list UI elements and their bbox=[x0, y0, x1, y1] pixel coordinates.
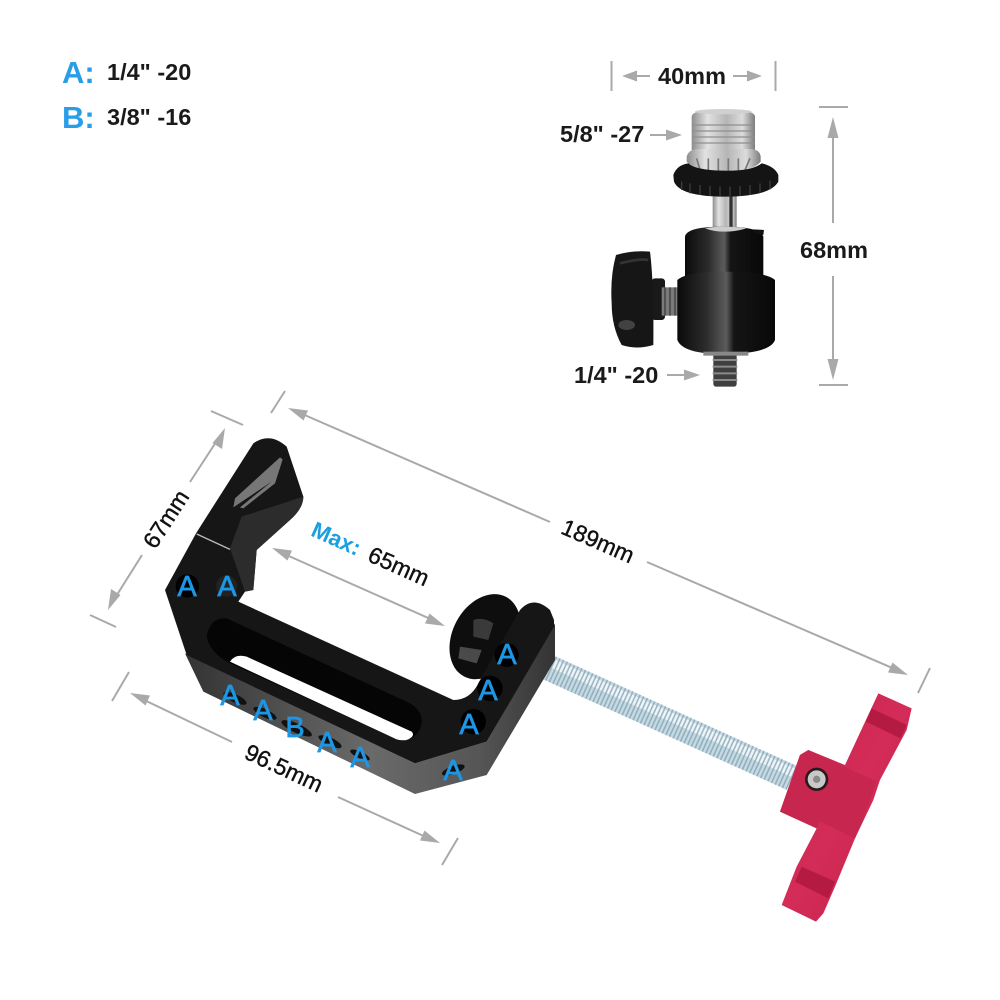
arm seam bbox=[197, 534, 230, 549]
hub shading bbox=[780, 750, 877, 838]
knob screw bbox=[652, 278, 680, 320]
dimension: 96.5mm slot length: 96.5mm bbox=[241, 739, 327, 797]
handle body bbox=[780, 693, 912, 922]
dimension: 67mm jaw height: 67mm bbox=[138, 485, 194, 553]
mounting hole labels: A bbox=[478, 675, 498, 707]
silver adapter bbox=[692, 109, 755, 150]
dimension: 68mm height: 68mm bbox=[800, 237, 868, 263]
side holes bbox=[222, 689, 466, 778]
black knurled wheel bbox=[673, 163, 778, 197]
lower lobe shading bbox=[795, 867, 835, 898]
threaded bolt bbox=[713, 352, 737, 387]
mounting hole labels: A bbox=[177, 571, 197, 603]
ball socket upper body bbox=[685, 227, 764, 280]
dimension: max 65mm opening: Max: bbox=[308, 517, 365, 561]
clamp pad knob bbox=[435, 582, 535, 692]
mounting hole labels: A bbox=[220, 680, 240, 712]
threaded screw rod bbox=[543, 660, 794, 778]
mounting hole labels: B bbox=[285, 712, 305, 744]
dimension: 189mm length bbox=[271, 391, 930, 693]
dimension: 40mm width: 40mm bbox=[658, 63, 726, 89]
dimension: 67mm jaw height bbox=[90, 411, 243, 627]
dimension: max 65mm opening: 65mm bbox=[364, 541, 433, 591]
stem bbox=[713, 195, 737, 232]
silver knurled ring bbox=[687, 149, 761, 172]
dimension: 96.5mm slot length bbox=[112, 672, 458, 865]
mounting hole labels: A bbox=[217, 571, 237, 603]
mounting hole labels: A bbox=[350, 742, 370, 774]
legend: thread sizes bbox=[62, 55, 191, 135]
lower body cylinder bbox=[677, 272, 775, 356]
arm silver reflection bbox=[233, 457, 283, 508]
dimension: 40mm width bbox=[612, 61, 776, 91]
label: 1/4 inch -20 thread with arrow bbox=[574, 362, 700, 388]
mounting hole labels: A bbox=[459, 709, 479, 741]
legend row B: B: bbox=[62, 100, 95, 135]
legend row A bbox=[62, 55, 191, 90]
arm front highlight bbox=[230, 497, 303, 592]
legend row B bbox=[62, 100, 191, 135]
clamp side face bbox=[185, 623, 555, 794]
legend row A: A: bbox=[62, 55, 95, 90]
clamp top face bbox=[165, 438, 554, 763]
mounting hole labels: A bbox=[497, 639, 517, 671]
hex screw bbox=[805, 768, 828, 791]
top holes bbox=[176, 574, 519, 734]
dimension: max 65mm opening bbox=[272, 516, 445, 626]
red T-handle knob bbox=[780, 693, 912, 922]
mounting hole labels: A bbox=[443, 755, 463, 787]
label: 1/4 inch -20 thread with arrow: 1/4" -20 bbox=[574, 362, 658, 388]
legend row A: 1/4" -20 bbox=[107, 59, 191, 85]
C-clamp body bbox=[165, 438, 555, 794]
mounting hole labels: A bbox=[253, 695, 273, 727]
mounting hole labels bbox=[177, 571, 517, 787]
legend row B: 3/8" -16 bbox=[107, 104, 191, 130]
upper lobe shading bbox=[866, 708, 907, 738]
label: 5/8 inch -27 thread with arrow bbox=[560, 121, 682, 147]
dimension: 189mm length: 189mm bbox=[558, 514, 638, 568]
slot bbox=[207, 618, 422, 741]
dimension: 68mm height bbox=[800, 107, 868, 385]
label: 5/8 inch -27 thread with arrow: 5/8" -27 bbox=[560, 121, 644, 147]
mounting hole labels: A bbox=[317, 727, 337, 759]
ball head mount photo bbox=[611, 109, 778, 387]
thumb knob bbox=[611, 251, 653, 347]
slot see-through bbox=[230, 656, 413, 740]
